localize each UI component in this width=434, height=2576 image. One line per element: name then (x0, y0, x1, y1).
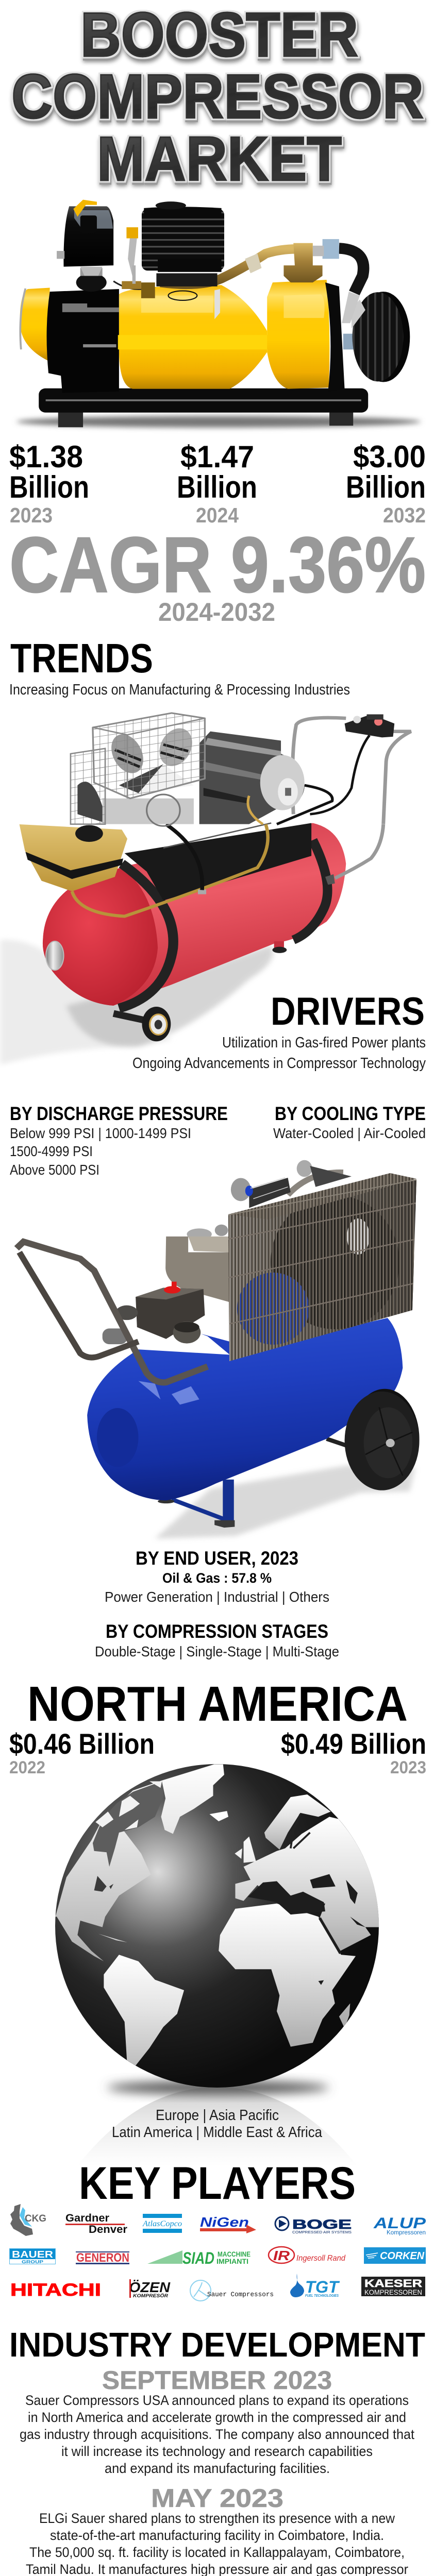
segment: by discharge pressure: 1500-4999 PSI (10, 1143, 93, 1159)
logo: GENERON: GENERON (76, 2251, 129, 2265)
panel: trends: TRENDS (10, 635, 153, 681)
illustration: globe (55, 1761, 388, 2090)
logo: BAUER: GROUP (22, 2260, 44, 2264)
region: north america: NORTH AMERICA (27, 1676, 408, 1732)
illustration: yellow compressor (16, 200, 421, 428)
segment: by discharge pressure: Above 5000 PSI (10, 1162, 99, 1178)
logo: NiGen: NiGen (200, 2214, 249, 2230)
stat: 2032 market size: $3.00 (353, 439, 426, 474)
segment: by end user: BY END USER, 2023 (136, 1548, 298, 1569)
logo: TGT (290, 2274, 340, 2298)
title: BOOSTER (80, 0, 358, 70)
CAGR figure: 2024-2032 (158, 598, 275, 626)
logo: TGT: TGT (305, 2278, 340, 2296)
segment: by end user (105, 1548, 329, 1605)
logo: CORKEN: CORKEN (380, 2250, 425, 2262)
logo: Ingersoll Rand (269, 2247, 346, 2263)
region: north america: 2022 (9, 1758, 45, 1777)
logo: Kaeser: KAESER (364, 2278, 422, 2290)
stat: 2023 market size (9, 439, 89, 527)
logo: CORKEN (364, 2247, 426, 2264)
key player logos (9, 2204, 426, 2301)
logo: Gardner Denver (65, 2212, 127, 2235)
panel: trends (9, 635, 350, 698)
logo: Hitachi: HITACHI (10, 2280, 101, 2300)
stat: 2023 market size: $1.38 (9, 439, 83, 474)
segment: by discharge pressure: Below 999 PSI | 1000-1499 PSI (10, 1125, 191, 1141)
region: north america: $0.46 Billion (9, 1727, 155, 1760)
illustration: blue compressor (16, 1160, 420, 1538)
logo: BAUER (9, 2248, 56, 2264)
development: may 2023 (9, 2484, 425, 2576)
logo: Ozen Kompresor: ÖZEN (129, 2279, 171, 2295)
other regions (112, 2107, 323, 2141)
logo: Kaeser: KOMPRESSOREN (364, 2288, 422, 2296)
segment: by end user: Oil & Gas : 57.8 % (162, 1570, 272, 1586)
logo: TGT: FUEL TECHNOLOGIES (305, 2294, 339, 2298)
logo: ALUP (373, 2215, 426, 2236)
globe shadow (107, 2081, 329, 2094)
development: may 2023: state-of-the-art manufacturing facility in Coimbatore, India. (50, 2528, 384, 2543)
development: september 2023: gas industry through acquisitions. The company also announced that (20, 2427, 414, 2442)
segment: by discharge pressure: BY DISCHARGE PRESSURE (10, 1103, 228, 1124)
logo: CKG: CKG (25, 2213, 46, 2224)
stat: 2032 market size (346, 439, 426, 527)
stat: 2023 market size: Billion (9, 470, 89, 504)
logo: BOGE: COMPRESSED AIR SYSTEMS (292, 2231, 352, 2234)
segment: by compression stages (95, 1621, 339, 1659)
stat: 2024 market size: Billion (177, 470, 257, 504)
segment: by end user: Power Generation | Industrial | Others (105, 1589, 329, 1605)
title (11, 0, 424, 194)
logo: BOGE: BOGE (292, 2217, 352, 2232)
logo: BOGE (275, 2217, 352, 2234)
development: september 2023 (20, 2366, 414, 2476)
illustration: red tank compressor (0, 713, 411, 1065)
logo: Sauer Compressors: Sauer Compressors (207, 2291, 274, 2298)
other regions: Latin America | Middle East & Africa (112, 2124, 323, 2141)
segment: by cooling type (273, 1103, 426, 1141)
logo: SIAD (147, 2249, 251, 2267)
region: north america (9, 1676, 426, 1777)
logo: NiGen (200, 2214, 256, 2233)
logo: Ingersoll Rand: IR (273, 2248, 290, 2263)
segment: by discharge pressure (10, 1103, 228, 1178)
stat: 2032 market size: 2032 (383, 503, 426, 527)
segment: by compression stages: Double-Stage | Single-Stage | Multi-Stage (95, 1643, 339, 1659)
heading: key players: KEY PLAYERS (79, 2157, 356, 2209)
logo: Gardner Denver: Denver (89, 2224, 127, 2235)
development: may 2023: The 50,000 sq. ft. facility is located in Kallappalayam, Coimbatore, (29, 2545, 405, 2560)
logo: Sauer Compressors (190, 2280, 274, 2301)
stat: 2023 market size: 2023 (10, 503, 53, 527)
logo: Ingersoll Rand: Ingersoll Rand (296, 2254, 346, 2263)
globe reflection (77, 2087, 357, 2166)
region: north america: 2023 (390, 1758, 426, 1777)
panel: drivers (132, 990, 426, 1072)
title: MARKET (97, 124, 342, 194)
development: september 2023: SEPTEMBER 2023 (102, 2366, 332, 2395)
logo: Ozen Kompresor: KOMPRESÖR (133, 2293, 169, 2298)
logo: BAUER: BAUER (12, 2249, 53, 2260)
logo: CKG (10, 2204, 46, 2236)
logo: Atlas Copco (142, 2214, 182, 2233)
panel: trends: Increasing Focus on Manufacturing & Processing Industries (9, 682, 350, 698)
stat: 2024 market size (177, 439, 257, 527)
development: may 2023: MAY 2023 (151, 2484, 283, 2513)
logo: SIAD: SIAD (182, 2249, 214, 2267)
stat: 2024 market size: $1.47 (180, 439, 254, 474)
logo: Gardner Denver: Gardner (65, 2212, 109, 2224)
logo: Kaeser (361, 2277, 425, 2296)
logo: SIAD: IMPIANTI (216, 2257, 248, 2265)
segment: by compression stages: BY COMPRESSION STAGES (106, 1621, 328, 1642)
development: september 2023: and expand its manufacturing facilities. (105, 2461, 330, 2476)
logo: SIAD: MACCHINE (218, 2250, 251, 2258)
logo: Atlas Copco: AtlasCopco (142, 2219, 182, 2228)
development: september 2023: Sauer Compressors USA announced plans to expand its operations (25, 2393, 409, 2408)
development: september 2023: in North America and accelerate growth in the compressed air and (28, 2410, 406, 2425)
stat: 2024 market size: 2024 (196, 503, 239, 527)
other regions: Europe | Asia Pacific (156, 2107, 279, 2124)
development: september 2023: it will increase its technology and research capabilities (61, 2444, 373, 2459)
logo: ALUP: ALUP (373, 2215, 426, 2232)
development: may 2023: ELGi Sauer shared plans to strengthen its presence with a new (39, 2511, 395, 2526)
logo: ALUP: Kompressoren (387, 2229, 426, 2236)
